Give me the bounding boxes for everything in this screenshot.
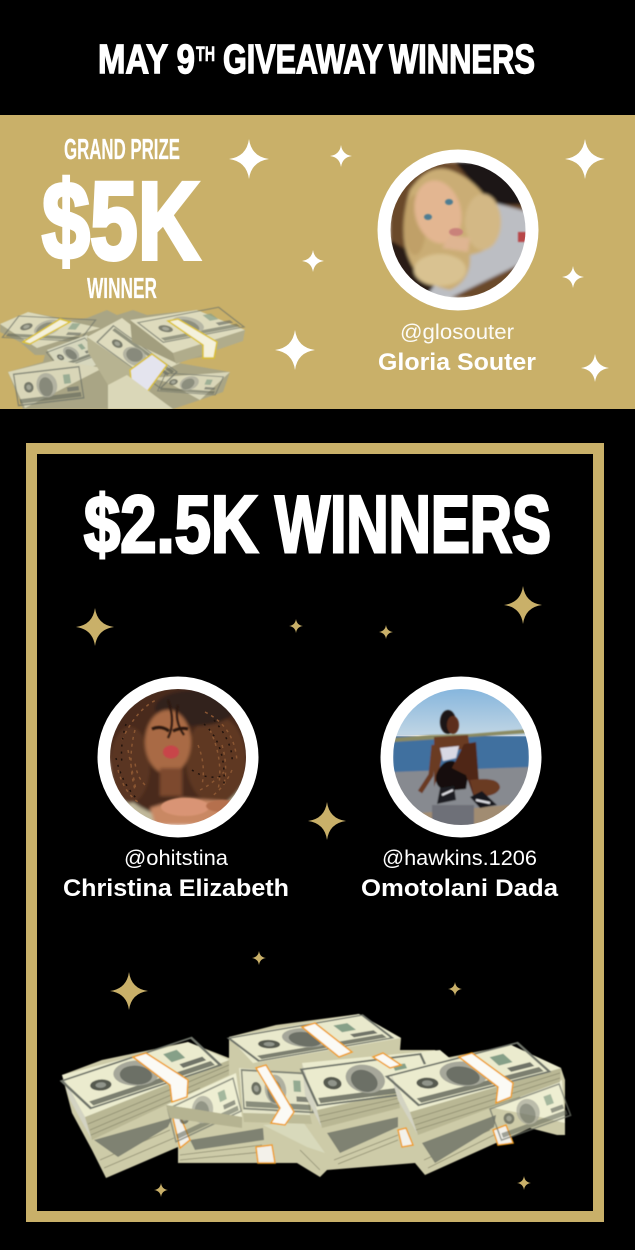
winner photo: Omotolani Dada xyxy=(380,676,542,838)
heading: grand prize: GRAND PRIZE xyxy=(64,134,180,166)
name: Christina Elizabeth: Christina Elizabeth xyxy=(63,875,289,902)
pile silhouette xyxy=(62,1014,565,1178)
front top bundle: centre xyxy=(302,1063,322,1128)
lower bundles xyxy=(100,1130,494,1170)
label: winner: WINNER xyxy=(87,273,157,305)
winner photo: Christina Elizabeth xyxy=(98,676,258,838)
front top bundle: left xyxy=(62,1075,92,1140)
heading: $2.5K winners: $2.5K xyxy=(84,480,258,570)
money pile: $2.5K winners xyxy=(62,1014,571,1178)
title: MAY 9 xyxy=(98,36,195,82)
title: TH xyxy=(196,43,215,66)
title: GIVEAWAY xyxy=(223,36,383,82)
panel: $2.5K winners frame xyxy=(32,448,598,1216)
money pile: grand prize xyxy=(0,307,245,409)
winner photo: Gloria Souter xyxy=(378,150,538,310)
title xyxy=(98,36,535,82)
name: Gloria Souter: Gloria Souter xyxy=(378,349,536,376)
handle: ohitstina: @ohitstina xyxy=(124,847,228,870)
handle: glosouter: @glosouter xyxy=(400,321,514,344)
handle: hawkins.1206: @hawkins.1206 xyxy=(382,847,537,870)
gold sparkles xyxy=(76,586,542,1197)
white sparkles xyxy=(229,139,609,382)
back top bundle xyxy=(229,1014,401,1063)
prize amount: $5K: $5K xyxy=(42,160,200,283)
panel: grand prize xyxy=(0,115,635,409)
middle face bundles xyxy=(166,1073,242,1117)
title: WINNERS xyxy=(389,36,535,82)
name: Omotolani Dada: Omotolani Dada xyxy=(361,875,559,902)
front top bundle: right xyxy=(390,1072,418,1135)
heading: $2.5K winners xyxy=(84,480,551,570)
